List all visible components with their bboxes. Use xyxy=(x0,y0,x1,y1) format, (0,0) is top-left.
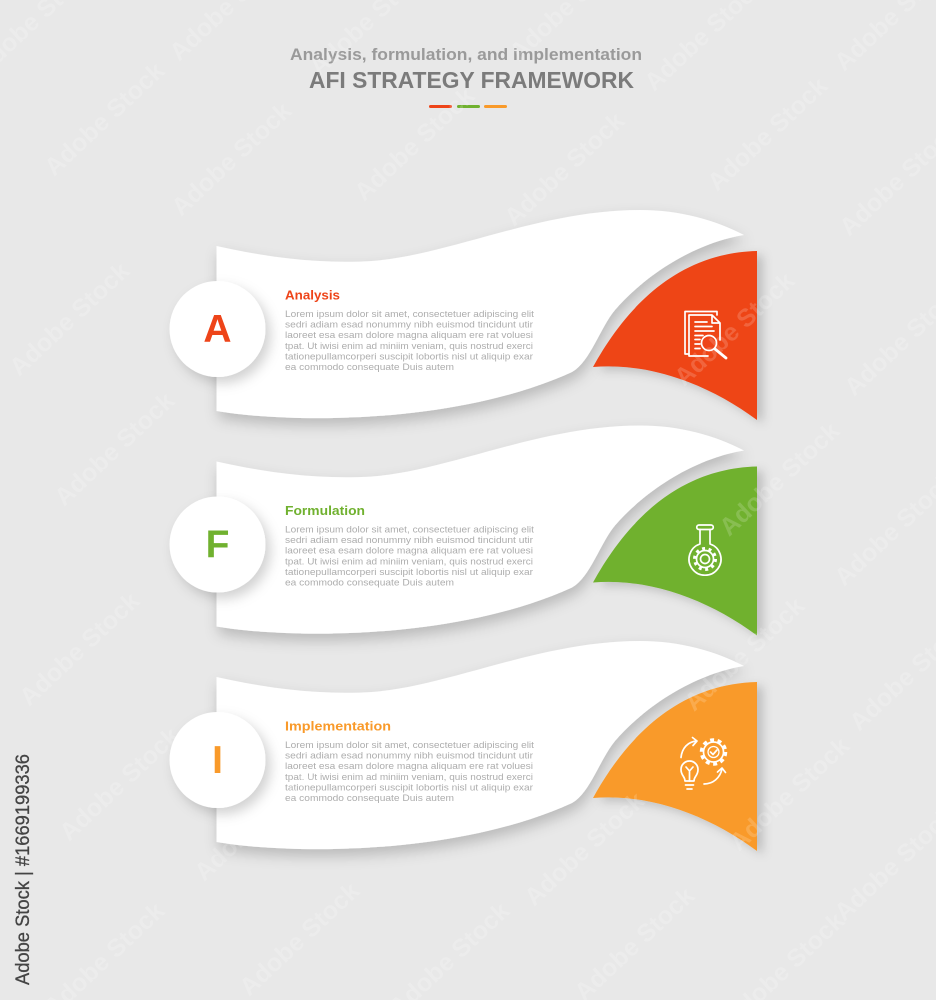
icon: gear, bulb and cycle arrows xyxy=(681,738,726,789)
body text: laoreet esa esam dolore magna aliquam ere rat voluesi xyxy=(285,761,533,772)
letter badge xyxy=(170,712,266,808)
body text: tpat. Ut iwisi enim ad miniim veniam, quis nostrud exerci xyxy=(285,341,533,352)
heading: analysis: Analysis xyxy=(285,288,340,302)
body text: Lorem ipsum dolor sit amet, consectetuer adipiscing elit xyxy=(285,740,534,751)
ribbon card xyxy=(216,210,744,418)
icon: document with magnifier xyxy=(685,312,726,358)
body text xyxy=(285,740,534,804)
colour dashes xyxy=(429,105,507,108)
watermarks: Adobe Stock xyxy=(669,267,800,391)
ribbon card xyxy=(216,641,744,849)
watermarks: Adobe Stock xyxy=(4,257,135,381)
coloured wing xyxy=(593,251,757,420)
body text: ea commodo consequate Duis autem xyxy=(285,578,454,588)
panel: formulation xyxy=(170,426,757,636)
coloured wing xyxy=(593,682,757,851)
coloured wing xyxy=(593,466,757,636)
panel: analysis xyxy=(170,210,757,420)
watermarks: Adobe Stock xyxy=(714,417,845,541)
watermarks: Adobe Stock xyxy=(679,592,810,716)
watermarks: Adobe Stock xyxy=(724,732,855,856)
body text: laoreet esa esam dolore magna aliquam ere rat voluesi xyxy=(285,330,533,341)
ribbon card xyxy=(216,426,744,634)
main heading: AFI STRATEGY FRAMEWORK xyxy=(309,67,634,93)
body text: ea commodo consequate Duis autem xyxy=(285,793,454,804)
watermarks: Adobe Stock xyxy=(499,107,630,231)
body text xyxy=(285,309,534,373)
body text: tationepullamcorperi suscipit lobortis nisl ut aliquip exar xyxy=(285,567,533,578)
panel: implementation xyxy=(170,641,757,851)
body text: Lorem ipsum dolor sit amet, consectetuer adipiscing elit xyxy=(285,309,534,320)
title block xyxy=(290,45,642,108)
letter badge xyxy=(170,281,266,377)
body text: sedri adiam esad nonummy nibh euismod tincidunt utir xyxy=(285,751,533,762)
watermarks: Adobe Stock xyxy=(39,57,170,181)
subtitle: Analysis, formulation, and implementation xyxy=(290,45,642,64)
body text: Lorem ipsum dolor sit amet, consectetuer adipiscing elit xyxy=(285,524,534,536)
watermarks: Adobe Stock xyxy=(54,722,185,846)
letter badge xyxy=(170,496,266,592)
letter badge: I xyxy=(212,739,223,782)
body text: laoreet esa esam dolore magna aliquam ere rat voluesi xyxy=(285,546,533,557)
body text xyxy=(285,524,534,588)
body text: ea commodo consequate Duis autem xyxy=(285,362,454,373)
watermarks: Adobe Stock xyxy=(14,587,145,711)
heading: implementation: Implementation xyxy=(285,718,391,734)
stock credit: Adobe Stock | #1669199336 xyxy=(13,754,34,985)
watermarks: Adobe Stock xyxy=(234,877,365,1000)
letter badge: A xyxy=(203,308,232,351)
watermarks: Adobe Stock xyxy=(49,387,180,511)
body text: tationepullamcorperi suscipit lobortis nisl ut aliquip exar xyxy=(285,782,533,793)
body text: tpat. Ut iwisi enim ad miniim veniam, quis nostrud exerci xyxy=(285,556,533,567)
body text: tationepullamcorperi suscipit lobortis nisl ut aliquip exar xyxy=(285,351,533,362)
watermarks: Adobe Stock xyxy=(166,97,297,221)
watermarks: Adobe Stock xyxy=(189,762,320,886)
body text: sedri adiam esad nonummy nibh euismod tincidunt utir xyxy=(285,535,533,546)
watermarks: Adobe Stock xyxy=(349,82,480,206)
body text: sedri adiam esad nonummy nibh euismod tincidunt utir xyxy=(285,320,533,331)
body text: tpat. Ut iwisi enim ad miniim veniam, quis nostrud exerci xyxy=(285,772,533,783)
letter badge: F xyxy=(206,524,229,566)
icon: flask with gear xyxy=(689,525,721,575)
watermarks: Adobe Stock xyxy=(519,787,650,911)
heading: formulation: Formulation xyxy=(285,503,365,518)
watermarks: Adobe Stock xyxy=(702,72,833,196)
